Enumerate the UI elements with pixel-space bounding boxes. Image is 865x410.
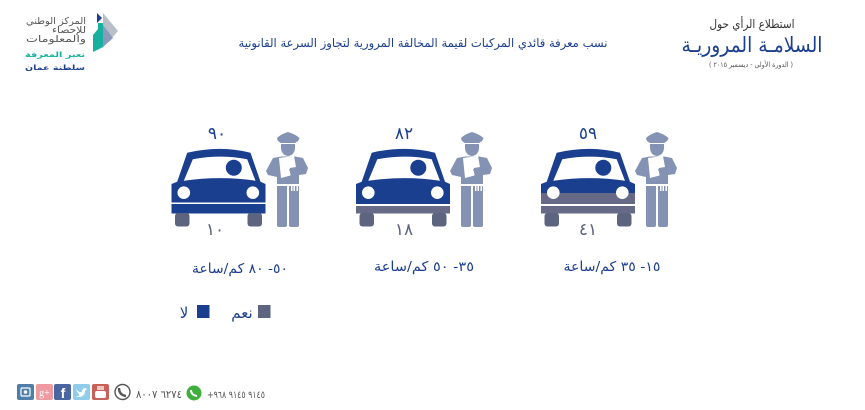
logo text: والمعلومات xyxy=(26,34,86,45)
logo text: للإحصاء xyxy=(52,25,86,36)
speed label: ٥٠- ٨٠ كم/ساعة xyxy=(192,261,288,277)
logo mark xyxy=(93,13,118,52)
group: 50-80 km/h xyxy=(172,124,308,277)
logo tagline: نعبر المعرفة xyxy=(25,50,85,59)
survey name: السلامـة المروريـة xyxy=(682,33,822,57)
logo text xyxy=(26,16,86,45)
police officer xyxy=(266,132,308,227)
icon: google plus: g+ xyxy=(39,388,50,399)
speed label: ٣٥- ٥٠ كم/ساعة xyxy=(374,259,474,275)
group: 15-35 km/h xyxy=(541,124,677,275)
speed label: ١٥- ٣٥ كم/ساعة xyxy=(564,259,660,275)
value yes: ٩٠ xyxy=(208,124,226,144)
car 82 18 xyxy=(356,149,450,226)
value no: ١٠ xyxy=(206,220,224,240)
icon: instagram xyxy=(17,384,34,400)
logo: national centre for statistics and information xyxy=(25,13,118,72)
legend label no: لا xyxy=(180,304,188,322)
value yes: ٨٢ xyxy=(395,124,413,144)
police officer xyxy=(450,132,492,227)
icon: google plus xyxy=(36,384,53,400)
car 90 10 xyxy=(172,149,266,226)
value no: ١٨ xyxy=(395,220,413,240)
legend swatch yes xyxy=(258,305,270,318)
group: 35-50 km/h xyxy=(356,124,492,275)
icon: phone xyxy=(115,384,130,400)
whatsapp number: +٩١٤٥ ٩١٤٥ ٩٦٨ xyxy=(207,390,265,401)
value no: ٤١ xyxy=(579,220,597,240)
survey heading xyxy=(682,16,822,69)
survey intro: استطلاع الرأي حول xyxy=(710,16,794,32)
icon: facebook xyxy=(54,384,71,401)
footer contacts xyxy=(17,384,265,401)
main question title: نسب معرفة قائدي المركبات لقيمة المخالفة المرورية لتجاوز السرعة القانونية xyxy=(238,36,608,51)
icon: facebook: f xyxy=(61,385,66,401)
icon: twitter xyxy=(73,384,90,400)
value yes: ٥٩ xyxy=(579,124,597,144)
survey edition: ( الدورة الأولى - ديسمبر ٢٠١٥ ) xyxy=(709,60,793,69)
legend label yes: نعم xyxy=(231,304,253,322)
legend swatch no xyxy=(197,305,210,318)
legend xyxy=(180,304,270,322)
logo text: المركز الوطني xyxy=(26,16,86,27)
police officer xyxy=(635,132,677,227)
car 59 41 xyxy=(541,149,635,226)
icon: whatsapp xyxy=(186,386,202,400)
icon: youtube xyxy=(92,384,109,400)
phone number: ٦٢٧٤ ٨٠٠٧ xyxy=(136,388,182,401)
logo country: سلطنة عمان xyxy=(25,64,85,72)
